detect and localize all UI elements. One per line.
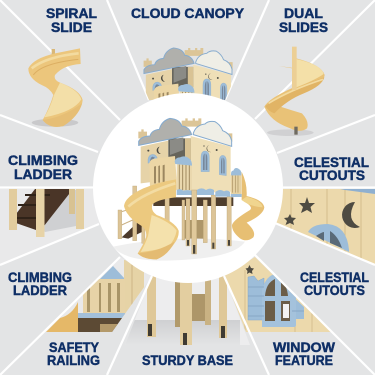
label: spiral slide	[46, 6, 97, 35]
photo panel: climbing ladder	[9, 189, 84, 237]
icon: spiral slide	[28, 48, 83, 127]
photo panel: window feature	[224, 257, 330, 332]
label: safety railing: SAFETY	[49, 340, 99, 355]
label: climbing ladder lower	[8, 270, 72, 298]
label: celestial cutouts upper	[294, 155, 369, 183]
label: safety railing: RAILING	[47, 353, 100, 368]
photo panel: safety railing	[46, 260, 144, 332]
label: sturdy base: STURDY BASE	[142, 353, 233, 368]
label: climbing ladder upper: LADDER	[14, 167, 72, 182]
label: window feature	[273, 340, 335, 368]
label: celestial cutouts upper: CUTOUTS	[299, 168, 365, 183]
label: celestial cutouts lower: CUTOUTS	[304, 283, 365, 298]
label: spiral slide: SLIDE	[51, 20, 92, 35]
label: celestial cutouts lower	[300, 270, 369, 298]
icon: dual slide spiral	[264, 47, 325, 136]
photo panel: celestial cutouts	[276, 189, 375, 264]
label: celestial cutouts lower: CELESTIAL	[300, 270, 369, 285]
central playset illustration	[113, 118, 264, 261]
label: safety railing	[47, 340, 100, 368]
central circle	[93, 93, 283, 283]
photo panel: cloud canopy	[143, 48, 233, 100]
label: dual slides: SLIDES	[279, 20, 328, 35]
label: climbing ladder upper: CLIMBING	[8, 153, 78, 168]
photo panel: sturdy base	[130, 276, 250, 345]
label: dual slides: DUAL	[284, 6, 323, 21]
label: window feature: WINDOW	[273, 340, 335, 355]
label: spiral slide: SPIRAL	[46, 6, 97, 21]
label: climbing ladder lower: LADDER	[13, 283, 67, 298]
label: window feature: FEATURE	[275, 353, 333, 368]
label: climbing ladder lower: CLIMBING	[8, 270, 72, 285]
label: dual slides	[279, 6, 328, 35]
label: celestial cutouts upper: CELESTIAL	[294, 155, 369, 170]
label: cloud canopy: CLOUD CANOPY	[131, 6, 244, 21]
label: climbing ladder upper	[8, 153, 78, 182]
